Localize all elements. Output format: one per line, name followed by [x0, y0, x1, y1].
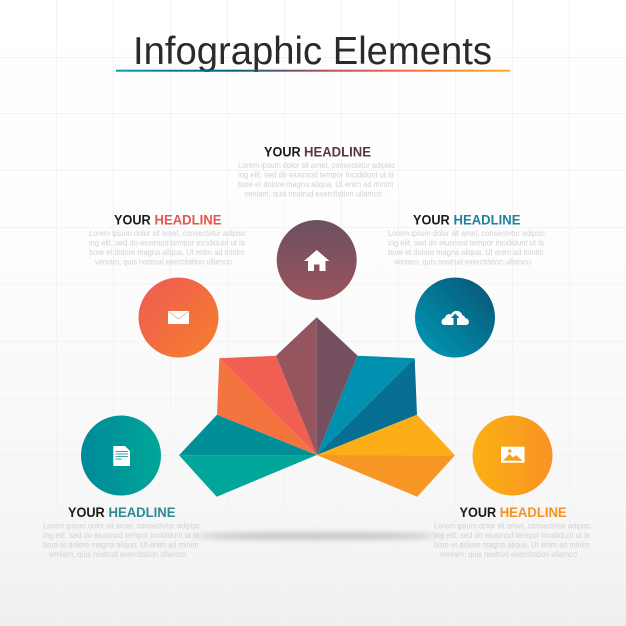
icon: envelope	[168, 311, 189, 324]
icon: picture	[501, 447, 524, 463]
headline: HEADLINE	[454, 212, 520, 228]
body text: ing elit, sed do eiusmod tempor incididunt ut la	[388, 238, 545, 248]
fan segment: yellow	[317, 415, 455, 497]
body text: veniam, quis nostrud exercitation ullamco	[49, 550, 187, 559]
panel: left headline	[89, 212, 246, 358]
headline: YOUR	[460, 505, 496, 520]
headline: HEADLINE	[154, 212, 222, 228]
body text	[238, 161, 395, 198]
body text	[43, 521, 200, 559]
body text: Lorem ipsum dolor sit amet, consectetur adipisc	[388, 229, 545, 238]
fan segment: orange-red	[217, 356, 317, 455]
headline: HEADLINE	[108, 505, 176, 520]
headline	[460, 505, 567, 520]
fan segment: green	[179, 415, 317, 497]
panel: bottom-left headline	[43, 416, 200, 559]
body text: veniam, quis nostrud exercitation ullamco	[394, 258, 532, 266]
circle with envelope icon	[138, 278, 218, 358]
body text: Lorem ipsum dolor sit amet, consectetur adipisc	[434, 521, 591, 530]
body text: bore et dolore magna aliqua. Ut enim ad minim	[388, 248, 544, 257]
circle with image icon	[472, 416, 552, 496]
drop shadow under fan	[195, 532, 439, 540]
body text	[89, 229, 246, 266]
body text: bore et dolore magna aliqua. Ut enim ad minim	[43, 540, 199, 549]
headline	[114, 212, 222, 228]
body text: bore et dolore magna aliqua. Ut enim ad minim	[89, 248, 245, 257]
body text: Lorem ipsum dolor sit amet, consectetur adipisc	[43, 521, 200, 530]
headline	[264, 144, 371, 160]
headline	[413, 212, 520, 228]
headline: YOUR	[413, 212, 450, 228]
fan segment: brown	[276, 317, 358, 455]
body text: Lorem ipsum dolor sit amet, consectetur adipisc	[89, 229, 246, 238]
headline: HEADLINE	[500, 505, 567, 520]
headline: YOUR	[264, 144, 301, 160]
circle with home icon	[277, 220, 357, 300]
headline: YOUR	[114, 212, 151, 228]
fan segment: blue	[317, 356, 417, 455]
headline: HEADLINE	[304, 144, 371, 160]
body text: veniam, quis nostrud exercitation ullamco	[440, 550, 578, 559]
icon: document	[113, 446, 130, 466]
body text: ing elit, sed do eiusmod tempor incididunt ut la	[434, 531, 591, 540]
body text: bore et dolore magna aliqua. Ut enim ad minim	[434, 540, 590, 549]
panel: right headline	[388, 212, 545, 358]
body text: ing elit, sed do eiusmod tempor incididunt ut la	[238, 170, 395, 180]
headline: YOUR	[68, 505, 105, 520]
icon: home	[304, 250, 330, 271]
icon: cloud upload	[442, 311, 469, 325]
title underline	[116, 70, 510, 72]
panel: bottom-right headline	[434, 416, 591, 559]
body text: ing elit, sed do eiusmod tempor incididunt ut la	[43, 531, 200, 540]
headline	[68, 505, 176, 520]
circle with document icon	[81, 416, 161, 496]
body text: Lorem ipsum dolor sit amet, consectetur adipisc	[238, 161, 395, 170]
fan diagram	[179, 317, 455, 497]
body text	[388, 229, 545, 266]
panel: top headline	[238, 144, 395, 300]
body text: ing elit, sed do eiusmod tempor incididunt ut la	[89, 238, 246, 248]
body text	[434, 521, 591, 559]
body text: veniam, quis nostrud exercitation ullamco	[95, 258, 233, 266]
circle with cloud upload icon	[415, 278, 495, 358]
body text: veniam, quis nostrud exercitation ullamco	[244, 190, 382, 198]
body text: bore et dolore magna aliqua. Ut enim ad minim	[238, 180, 394, 189]
title: Infographic Elements	[133, 30, 492, 73]
